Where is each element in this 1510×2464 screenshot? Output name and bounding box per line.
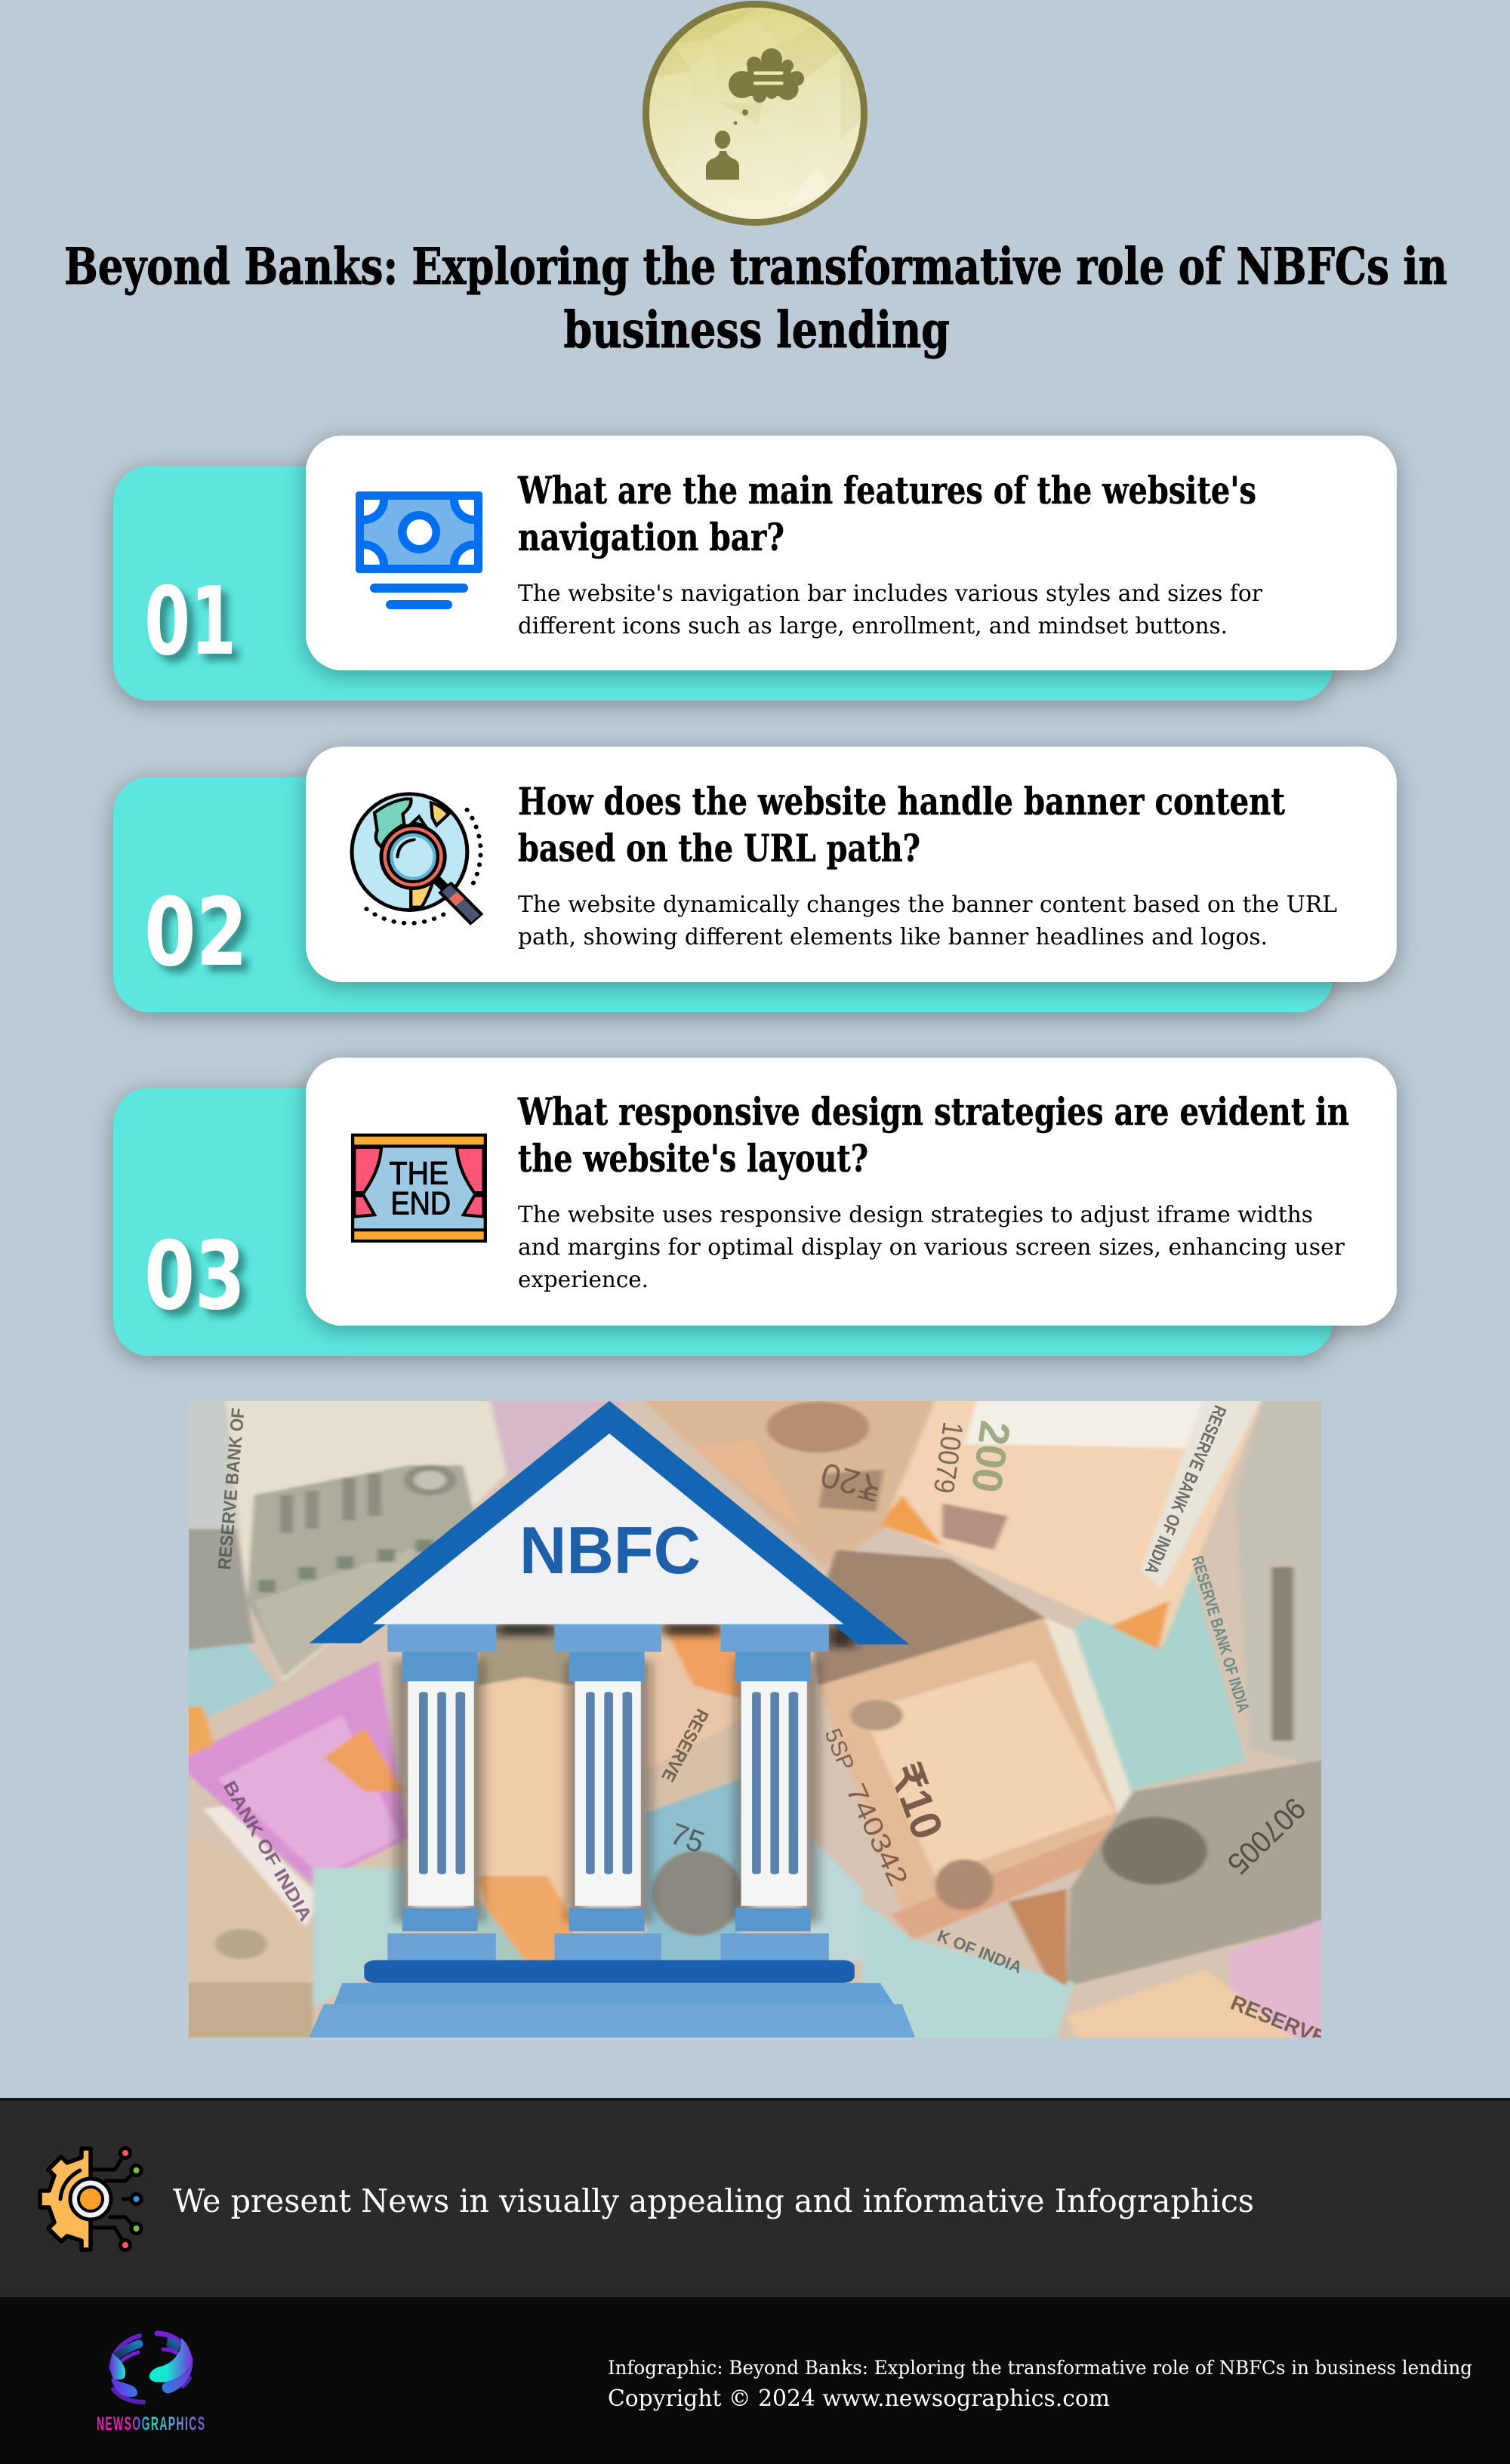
heading bbox=[517, 1089, 1349, 1181]
banknote lettering: RESERVE BANK OF INDIA bbox=[1141, 1403, 1230, 1577]
banknote lettering: BANK OF INDIA bbox=[219, 1777, 316, 1925]
banknote lettering: 907005 bbox=[1221, 1791, 1311, 1880]
body text bbox=[518, 581, 1263, 639]
heading: the website's layout? bbox=[518, 1136, 868, 1181]
teal number tab bbox=[113, 466, 1333, 701]
teal number tab bbox=[113, 1088, 1333, 1356]
body text: experience. bbox=[518, 1267, 649, 1293]
number 02: 02 bbox=[144, 878, 248, 987]
credit line: Infographic: Beyond Banks: Exploring the transformative role of NBFCs in business lending bbox=[608, 2357, 1472, 2379]
white card bbox=[306, 1058, 1397, 1326]
banknote lettering: ₹20 bbox=[816, 1455, 886, 1509]
heading: What are the main features of the website's bbox=[517, 468, 1256, 513]
heading: How does the website handle banner content bbox=[518, 779, 1285, 824]
tagline text: We present News in visually appealing and informative Infographics bbox=[173, 2182, 1254, 2219]
body text: The website's navigation bar includes various styles and sizes for bbox=[518, 581, 1263, 607]
panel: question 03 bbox=[113, 1058, 1397, 1356]
icon: theatre curtain with The End: END bbox=[390, 1186, 451, 1221]
body text: The website dynamically changes the banner content based on the URL bbox=[518, 892, 1337, 918]
bank steps bbox=[307, 1960, 917, 2041]
banknote lettering: K OF INDIA bbox=[935, 1926, 1025, 1977]
icon: banknote bbox=[356, 491, 482, 609]
banknote lettering: 740342 bbox=[840, 1779, 914, 1891]
body text bbox=[518, 1202, 1345, 1293]
logo: Newsographics: NEWSOGRAPHICS bbox=[97, 2414, 205, 2435]
banknote lettering: RESERVE BANK OF INDIA bbox=[1188, 1554, 1253, 1714]
number 01: 01 bbox=[144, 567, 236, 676]
logo: Newsographics bbox=[97, 2333, 205, 2435]
body text: and margins for optimal display on various screen sizes, enhancing user bbox=[518, 1234, 1345, 1261]
banknote lettering: RESERVE bbox=[657, 1705, 713, 1785]
heading: navigation bar? bbox=[518, 515, 784, 559]
white card bbox=[306, 436, 1397, 670]
heading bbox=[517, 468, 1256, 559]
panel: question 01 bbox=[113, 436, 1397, 701]
banknote lettering: ₹10 bbox=[880, 1757, 953, 1846]
banknote lettering: RESERVE bbox=[1228, 1991, 1330, 2050]
bank columns bbox=[387, 1624, 829, 1961]
title: business lending bbox=[563, 300, 950, 359]
body text: The website uses responsive design strategies to adjust iframe widths bbox=[518, 1202, 1313, 1228]
banknote lettering bbox=[214, 1403, 1330, 2050]
banknote lettering: 75 bbox=[666, 1817, 709, 1860]
number 03: 03 bbox=[144, 1221, 245, 1331]
icon: half gear with circuit lines bbox=[40, 2148, 141, 2250]
icon: thought cloud bbox=[706, 48, 804, 180]
icon: theatre curtain with The End bbox=[353, 1135, 485, 1241]
illustration: NBFC bank building over rupee notes bbox=[174, 1394, 1338, 2050]
bank roof bbox=[310, 1401, 910, 1644]
heading: based on the URL path? bbox=[518, 826, 920, 870]
teal number tab bbox=[113, 777, 1333, 1012]
banknote lettering: 200 bbox=[963, 1418, 1020, 1495]
panel: question 02 bbox=[113, 747, 1397, 1012]
NBFC label: NBFC bbox=[519, 1513, 701, 1588]
body text: path, showing different elements like banner headlines and logos. bbox=[518, 924, 1268, 950]
copyright line: Copyright © 2024 www.newsographics.com bbox=[608, 2385, 1110, 2412]
column gap shadows bbox=[399, 1623, 855, 1923]
banknote lettering: 10079 bbox=[927, 1420, 969, 1495]
white card bbox=[306, 747, 1397, 982]
title bbox=[64, 237, 1447, 359]
icon: globe with magnifying glass bbox=[352, 794, 481, 923]
body text: different icons such as large, enrollment, and mindset buttons. bbox=[518, 613, 1228, 639]
footer band: tagline bbox=[0, 2098, 1510, 2297]
icon: person thinking in a circular badge bbox=[643, 1, 867, 226]
footer band: credits bbox=[0, 2297, 1510, 2464]
banknote lettering: 5SP bbox=[820, 1725, 858, 1774]
heading bbox=[518, 779, 1285, 870]
icon: theatre curtain with The End: THE bbox=[390, 1156, 448, 1191]
banknote lettering: RESERVE BANK OF bbox=[214, 1407, 249, 1571]
body text bbox=[518, 892, 1337, 950]
